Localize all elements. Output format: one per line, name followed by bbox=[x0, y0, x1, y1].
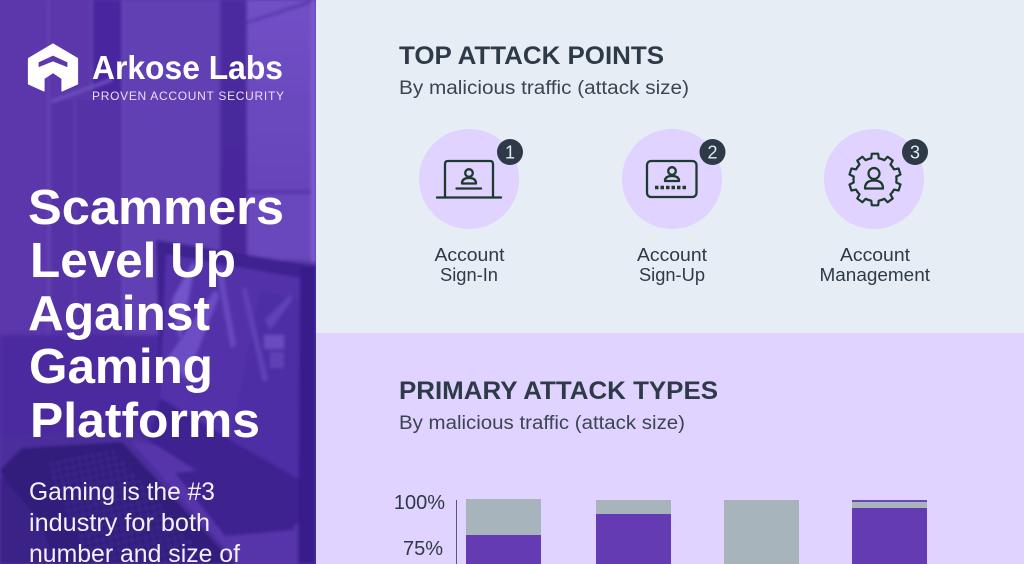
label: Account bbox=[434, 244, 504, 265]
title: Against bbox=[28, 287, 210, 341]
bar 1 bbox=[466, 499, 541, 564]
panel: top attack points background bbox=[316, 0, 1024, 333]
intro text: industry for both bbox=[29, 509, 210, 537]
icon: gear with user bbox=[848, 154, 902, 205]
title: Level Up bbox=[30, 234, 236, 288]
icon: Arkose chevron mark bbox=[28, 44, 78, 91]
title bbox=[28, 181, 284, 448]
rank badge 3: 3 bbox=[910, 142, 920, 162]
subheading: By malicious traffic (attack size) bbox=[399, 78, 689, 99]
photo: monitor bbox=[148, 240, 316, 530]
heading: primary attack types: PRIMARY ATTACK TYPES bbox=[399, 377, 718, 405]
rank badge 3 bbox=[902, 139, 928, 165]
y-axis labels: 100% bbox=[394, 492, 445, 514]
photo: desk bbox=[0, 439, 238, 564]
heading: top attack points: TOP ATTACK POINTS bbox=[399, 42, 664, 70]
label: Account bbox=[637, 244, 707, 265]
photo: left wall lower bbox=[0, 335, 160, 440]
logo: Arkose Labs bbox=[28, 44, 284, 103]
attack point 3: account management bbox=[820, 129, 930, 285]
photo: keyboard bbox=[0, 442, 235, 564]
attack point 1: account sign-in bbox=[419, 129, 523, 285]
logo wordmark: Arkose Labs bbox=[92, 49, 283, 86]
heading: primary attack types bbox=[399, 377, 718, 434]
bar 4 bbox=[852, 500, 927, 564]
intro text bbox=[29, 478, 240, 564]
y-axis labels bbox=[394, 492, 445, 560]
subheading: By malicious traffic (attack size) bbox=[399, 413, 685, 434]
rank badge 2: 2 bbox=[707, 142, 718, 162]
attack point 2: account sign-up bbox=[622, 129, 726, 285]
label: Sign-In bbox=[440, 264, 498, 285]
label: Account bbox=[840, 244, 910, 265]
icon circle bbox=[824, 129, 924, 229]
icon circle bbox=[419, 129, 519, 229]
heading: top attack points bbox=[399, 42, 689, 99]
logo tagline: PROVEN ACCOUNT SECURITY bbox=[92, 89, 284, 103]
y-axis line bbox=[456, 500, 457, 564]
bar 3 bbox=[724, 500, 799, 564]
stacked bar chart bbox=[394, 492, 927, 564]
icon: laptop with user bbox=[437, 161, 501, 198]
y-axis labels: 75% bbox=[403, 538, 443, 560]
label bbox=[820, 244, 930, 285]
rank badge 2 bbox=[700, 139, 726, 165]
label: Sign-Up bbox=[639, 264, 705, 285]
photo: mouse pad bbox=[175, 466, 295, 536]
rank badge 1: 1 bbox=[505, 142, 515, 162]
icon: login screen with password dots bbox=[647, 161, 696, 197]
label bbox=[637, 244, 707, 285]
panel: left photo hero bbox=[0, 0, 316, 564]
label bbox=[434, 244, 504, 285]
intro text: Gaming is the #3 bbox=[29, 478, 215, 506]
title: Gaming bbox=[29, 340, 213, 394]
title: Platforms bbox=[30, 394, 260, 448]
title: Scammers bbox=[28, 181, 284, 235]
bar 2 bbox=[596, 500, 671, 564]
panel: primary attack types background bbox=[316, 333, 1024, 564]
icon circle bbox=[622, 129, 722, 229]
label: Management bbox=[820, 264, 930, 285]
rank badge 1 bbox=[497, 139, 523, 165]
